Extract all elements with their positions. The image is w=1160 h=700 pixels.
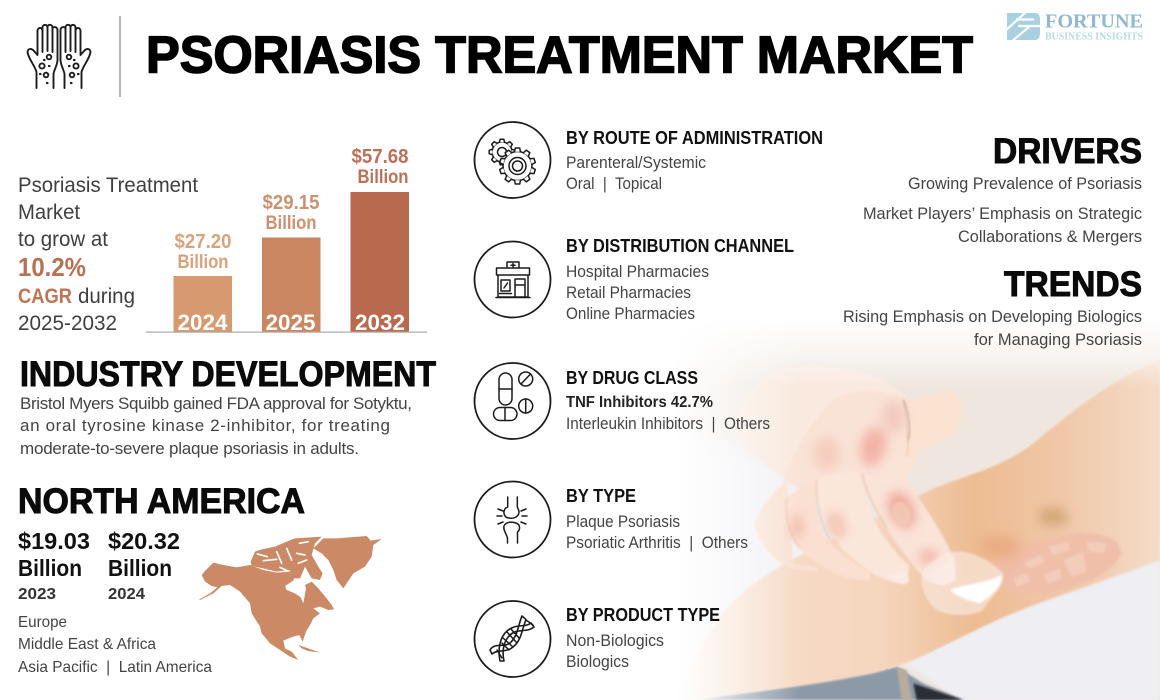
heading: industry development: INDUSTRY DEVELOPMENT (20, 355, 436, 394)
text: drivers list (863, 174, 1142, 246)
bar 2024: 2024 (178, 310, 228, 335)
segment: by distribution channel (474, 236, 794, 323)
stat: 2024 value: $20.32 (108, 528, 180, 554)
photo: arm with psoriasis plaques being treated with cream (620, 318, 1160, 700)
heading: BY PRODUCT TYPE (566, 605, 720, 625)
items: Plaque Psoriasis (566, 512, 680, 531)
heading: north america: NORTH AMERICA (18, 482, 305, 521)
logo: Fortune Business Insights: BUSINESS INSIGHTS (1045, 32, 1143, 42)
bar 2032: Billion (358, 167, 408, 188)
text: industry development body: Bristol Myers Squibb gained FDA approval for Sotyktu, (20, 394, 412, 413)
text: trends list: for Managing Psoriasis (974, 330, 1142, 349)
items: Non-Biologics (566, 631, 664, 650)
logo: Fortune Business Insights: FORTUNE (1045, 10, 1143, 32)
items (566, 512, 748, 552)
logo: Fortune Business Insights (1005, 10, 1143, 42)
icon: gears (474, 122, 550, 198)
stat: 2023 value: Billion (18, 555, 82, 581)
items (566, 394, 770, 433)
text: other regions: Asia Pacific | Latin America (18, 659, 212, 676)
stat: 2024 value: Billion (108, 555, 172, 581)
heading: BY ROUTE OF ADMINISTRATION (566, 128, 823, 148)
text: other regions (18, 614, 212, 676)
text: drivers list: Market Players’ Emphasis on Strategic (863, 204, 1142, 223)
text: market growth statement (18, 174, 198, 335)
icon: pills (474, 363, 550, 439)
bar chart: market size (146, 146, 427, 335)
items: Hospital Pharmacies (566, 262, 709, 281)
heading: BY DRUG CLASS (566, 368, 698, 388)
heading: BY TYPE (566, 486, 636, 506)
text: other regions: Middle East & Africa (18, 636, 156, 653)
text: drivers list: Growing Prevalence of Psoriasis (908, 174, 1142, 193)
segment: by product type (474, 601, 720, 677)
text: market growth statement: during (78, 285, 135, 308)
text: market growth statement: Market (18, 201, 80, 224)
title: PSORIASIS TREATMENT MARKET (146, 26, 973, 84)
text: market growth statement: Psoriasis Treatment (18, 174, 198, 197)
stat: 2023 value: $19.03 (18, 528, 90, 554)
bar 2024: Billion (178, 252, 228, 273)
items: Oral | Topical (566, 174, 662, 193)
icon: hands with psoriasis spots (28, 25, 90, 88)
stat: 2023 value (18, 528, 90, 603)
stat: 2024 value (108, 528, 180, 603)
bar 2025: 2025 (266, 310, 316, 335)
text: industry development body: an oral tyrosine kinase 2-inhibitor, for treating (20, 416, 390, 435)
heading: drivers: DRIVERS (993, 132, 1142, 171)
segment: by drug class (474, 363, 770, 439)
bar 2025: $29.15 (262, 192, 320, 214)
text: industry development body: moderate-to-severe plaque psoriasis in adults. (20, 439, 359, 458)
items: Online Pharmacies (566, 304, 695, 323)
items: Retail Pharmacies (566, 283, 691, 302)
items: TNF Inhibitors 42.7% (566, 394, 713, 411)
bar 2032 (350, 146, 409, 335)
bar 2025 (262, 192, 320, 335)
bar 2024: $27.20 (174, 231, 232, 253)
text: market growth statement: to grow at (18, 228, 108, 251)
text: trends list (843, 307, 1142, 349)
stat: 2023 value: 2023 (18, 586, 56, 603)
items (566, 153, 706, 193)
text: market growth statement: CAGR (18, 285, 72, 308)
bar 2025: Billion (266, 213, 316, 234)
items: Interleukin Inhibitors | Others (566, 415, 770, 433)
items: Parenteral/Systemic (566, 153, 706, 172)
bar 2032: 2032 (355, 310, 405, 335)
text: industry development body (20, 394, 412, 458)
bar 2024 (174, 231, 232, 335)
items: Biologics (566, 652, 629, 671)
map: north america (199, 536, 382, 660)
segment: by route of administration (474, 122, 823, 198)
text: market growth statement: 10.2% (18, 252, 86, 282)
icon: joint (474, 482, 550, 558)
items (566, 631, 664, 671)
heading: BY DISTRIBUTION CHANNEL (566, 236, 794, 256)
heading: trends: TRENDS (1004, 265, 1142, 304)
text: drivers list: Collaborations & Mergers (958, 227, 1142, 246)
text: trends list: Rising Emphasis on Developing Biologics (843, 307, 1142, 326)
text: market growth statement: 2025-2032 (18, 312, 117, 335)
bar 2032: $57.68 (352, 146, 408, 168)
icon: DNA helix (474, 601, 550, 677)
divider (119, 16, 121, 97)
items: Psoriatic Arthritis | Others (566, 534, 748, 552)
items (566, 262, 709, 323)
stat: 2024 value: 2024 (108, 586, 145, 603)
segment: by type (474, 482, 748, 558)
icon: pharmacy (474, 242, 550, 318)
text: other regions: Europe (18, 614, 67, 631)
